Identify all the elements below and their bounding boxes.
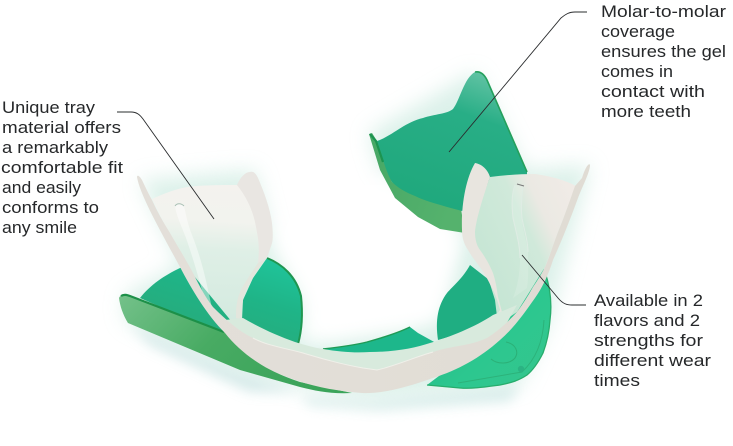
tray outer wall [119,295,352,393]
right white tray panel [462,163,576,325]
tray rim [121,295,224,332]
centre and right teal tray [323,260,551,388]
text block: flavors and strengths [594,291,711,390]
text block: tray material [1,98,123,237]
upper wing [237,172,273,263]
text block: flavors and strengths: different wear [594,351,711,370]
upper right green tray [369,72,527,233]
text block: molar coverage: comes in [601,62,673,81]
text block: tray material: conforms to [2,198,99,217]
folded flap [462,163,502,317]
text block: molar coverage: more teeth [601,102,691,121]
callout line: flavors and strengths [522,255,586,305]
tray outer wall [369,133,465,233]
product glow and shadow [125,72,590,410]
text block: molar coverage: Molar-to-molar [601,2,726,21]
text block: tray material: and easily [2,178,82,197]
left white tray panel [152,172,273,322]
text block: tray material: Unique tray [2,98,96,117]
lower left green tray [119,258,352,393]
text block: flavors and strengths: times [594,371,640,390]
translucent inner strip of tray [225,305,517,372]
text block: tray material: any smile [2,218,77,237]
tray rim [475,72,527,172]
tray embossed details [491,342,517,363]
callout line: molar coverage [449,12,587,152]
centre tray section [323,327,436,358]
band highlight [253,338,433,370]
text block: tray material: a remarkably [2,138,109,157]
text block: molar coverage: ensures the gel [601,42,726,61]
white tray front band [137,164,590,393]
text block: tray material: comfortable fit [1,158,123,177]
inner ridge [512,185,528,298]
text block: molar coverage: contact with [601,82,705,101]
right tray section [437,265,502,340]
text block: tray material: material offers [2,118,121,137]
text block: molar coverage [601,2,726,121]
tray inner surface [140,258,302,344]
text block: molar coverage: coverage [601,22,675,41]
text block: flavors and strengths: Available in 2 [594,291,703,310]
front flap fold [236,258,267,320]
inner ridge [175,204,212,308]
text block: flavors and strengths: strengths for [594,331,703,350]
text block: flavors and strengths: flavors and 2 [594,311,700,330]
callout line: tray material [117,112,214,219]
tray inner surface [377,72,527,211]
